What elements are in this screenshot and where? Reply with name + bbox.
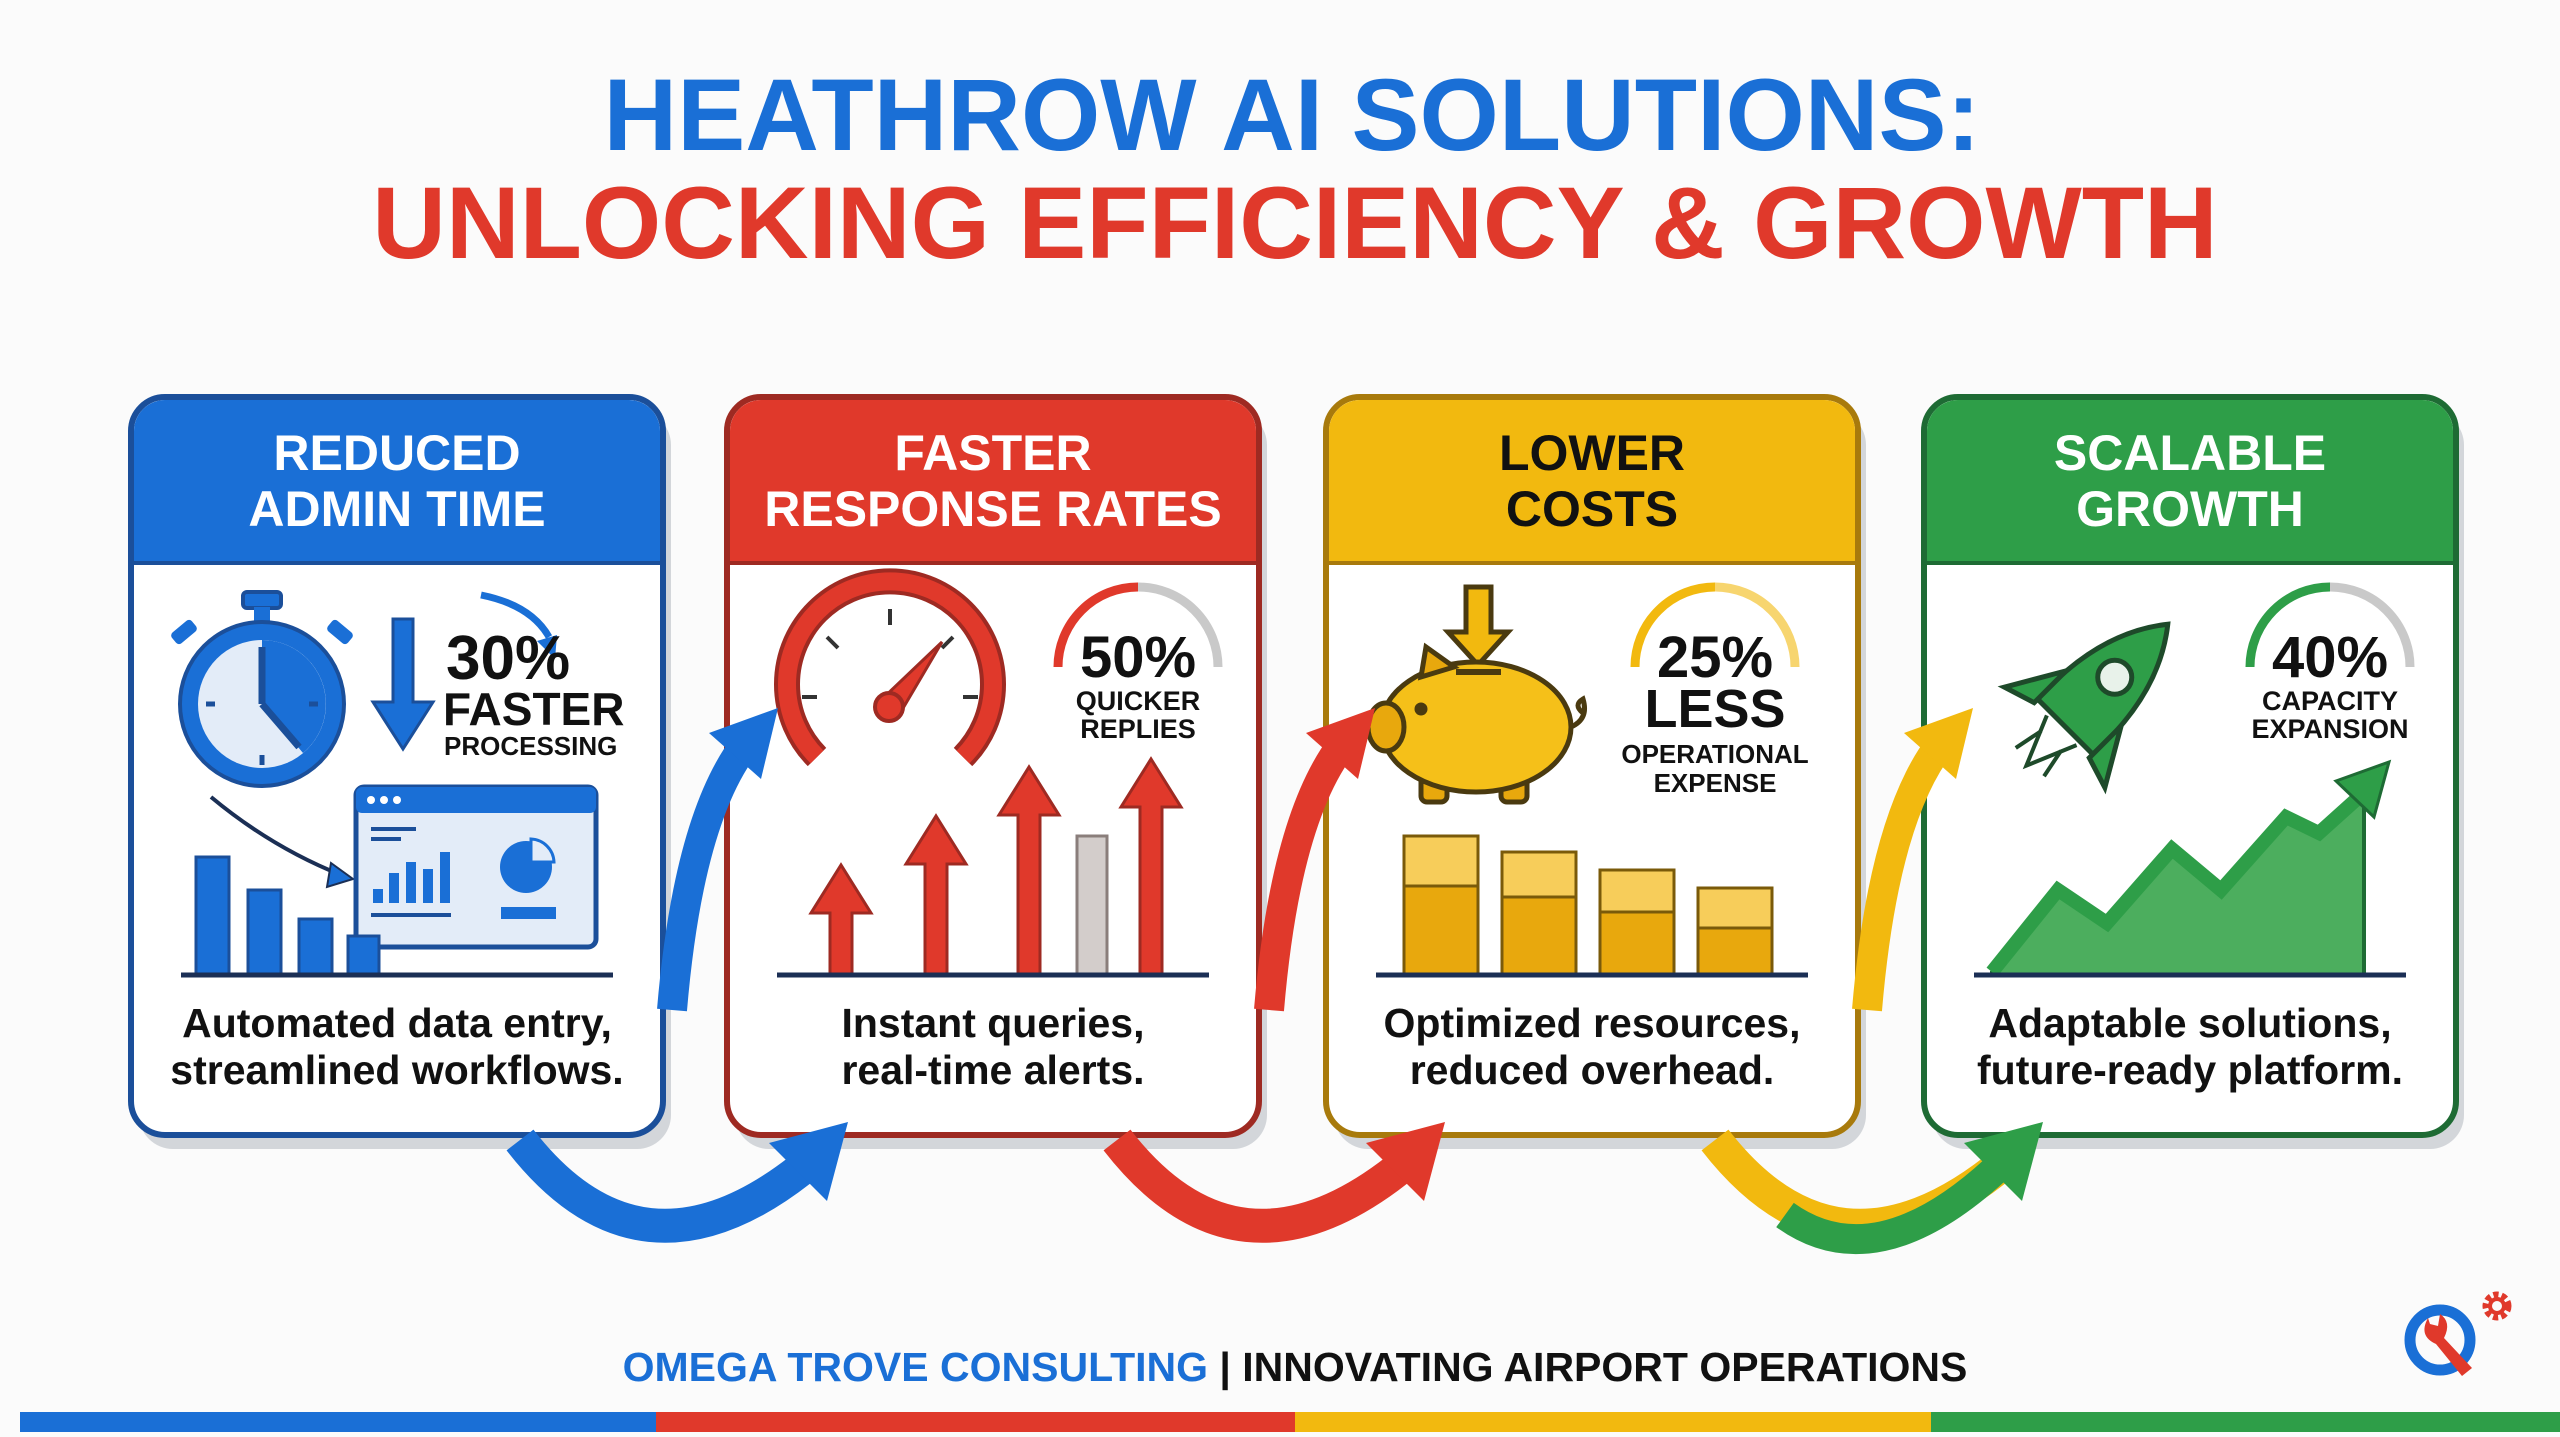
caption: real-time alerts. (841, 1047, 1145, 1093)
stat: 25% less operational expense (1621, 587, 1809, 798)
icon: piggy bank (1368, 587, 1584, 802)
heading: RESPONSE RATES (764, 481, 1222, 537)
caption (841, 1000, 1145, 1093)
chart: bars and dashboard (196, 787, 596, 975)
panel: scalable growth (1924, 397, 2464, 1149)
stat: 30% faster processing (443, 595, 624, 761)
stat: 30% faster processing: FASTER (443, 683, 624, 735)
heading: LOWER (1499, 425, 1685, 481)
stat: 50% quicker replies: 50% (1080, 625, 1196, 690)
heading: SCALABLE (2054, 425, 2326, 481)
title: HEATHROW AI SOLUTIONS: (604, 58, 1980, 172)
caption: reduced overhead. (1410, 1047, 1774, 1093)
chart: rising arrows (811, 759, 1181, 975)
caption (170, 1000, 624, 1093)
panel: faster response rates (727, 397, 1267, 1149)
heading (1499, 425, 1685, 537)
icon: rocket (1976, 574, 2218, 816)
caption: future-ready platform. (1977, 1047, 2403, 1093)
caption: Automated data entry, (182, 1000, 612, 1046)
icon: speedometer (787, 581, 993, 757)
heading: COSTS (1506, 481, 1678, 537)
caption: Adaptable solutions, (1988, 1000, 2392, 1046)
arrow: yellow-green connectors (1715, 708, 2043, 1239)
caption (1384, 1000, 1800, 1093)
chart: growth line (1992, 762, 2389, 975)
heading (764, 425, 1222, 537)
title: UNLOCKING EFFICIENCY & GROWTH (372, 166, 2218, 280)
icon: logo (2410, 1295, 2508, 1376)
footer text: OMEGA TROVE CONSULTING | INNOVATING AIRPORT OPERATIONS (623, 1344, 1967, 1390)
stat: 30% faster processing: 30% (446, 624, 570, 693)
heading: REDUCED (273, 425, 521, 481)
caption: Instant queries, (841, 1000, 1145, 1046)
arrow: blue connectors (520, 708, 848, 1226)
stat: 25% less operational expense: EXPENSE (1654, 768, 1776, 798)
heading: GROWTH (2076, 481, 2304, 537)
stat: 50% quicker replies (1058, 587, 1218, 744)
icon: stopwatch (170, 592, 354, 786)
stat: 40% capacity expansion: EXPANSION (2251, 714, 2409, 744)
stat: 25% less operational expense: LESS (1644, 679, 1786, 739)
chart: decreasing cost bars (1404, 836, 1772, 975)
panel: lower costs (1326, 397, 1866, 1149)
panel: reduced admin time (131, 397, 671, 1149)
stat: 40% capacity expansion: 40% (2272, 625, 2388, 690)
heading: ADMIN TIME (248, 481, 546, 537)
stat: 50% quicker replies: QUICKER (1076, 686, 1200, 716)
stat: 25% less operational expense: OPERATIONAL (1621, 739, 1809, 769)
heading (248, 425, 546, 537)
caption: streamlined workflows. (170, 1047, 624, 1093)
heading: FASTER (894, 425, 1092, 481)
stat: 30% faster processing: PROCESSING (444, 731, 617, 761)
stat: 40% capacity expansion (2250, 587, 2410, 744)
stat: 50% quicker replies: REPLIES (1080, 714, 1196, 744)
title (372, 58, 2218, 280)
arrow: red connectors (1117, 708, 1445, 1226)
icon: down arrow (373, 619, 433, 749)
heading (2054, 425, 2326, 537)
caption: Optimized resources, (1384, 1000, 1800, 1046)
stat: 40% capacity expansion: CAPACITY (2262, 686, 2398, 716)
color bar (20, 1412, 2560, 1432)
caption (1977, 1000, 2403, 1093)
stat: 25% less operational expense: 25% (1657, 625, 1773, 690)
